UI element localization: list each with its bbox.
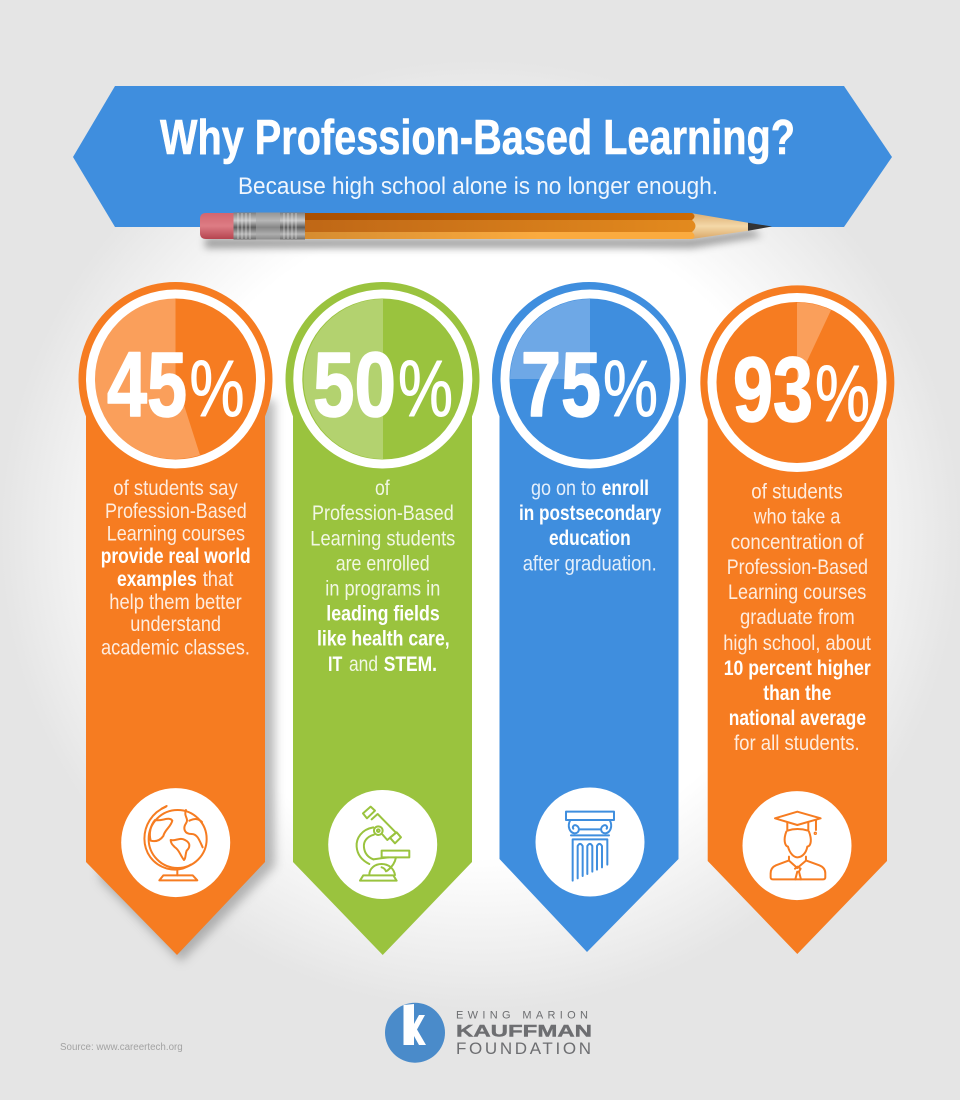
text block: Learning courses bbox=[728, 581, 866, 604]
pie chart bbox=[712, 298, 882, 468]
text block: go on to bbox=[531, 477, 596, 500]
logo wordmark: FOUNDATION bbox=[456, 1039, 591, 1058]
logo wordmark: EWING MARION bbox=[456, 1010, 588, 1022]
text block bbox=[723, 480, 871, 755]
text block: who take a bbox=[753, 506, 841, 528]
text block: for all students. bbox=[734, 732, 860, 755]
subtitle: Because high school alone is no longer enough. bbox=[238, 173, 718, 200]
icon: globe bbox=[121, 788, 230, 897]
panel: 93 percent: % bbox=[815, 349, 870, 438]
title: Why Profession-Based Learning? bbox=[160, 111, 795, 165]
header banner bbox=[73, 86, 892, 227]
text block: education bbox=[549, 527, 631, 550]
text block: Learning students bbox=[310, 528, 455, 550]
panel: 93 percent bbox=[700, 285, 894, 954]
text block: concentration of bbox=[731, 531, 863, 554]
logo mark bbox=[385, 1003, 445, 1063]
panel: 50 percent: % bbox=[398, 344, 453, 433]
text block: Profession-Based bbox=[105, 500, 247, 523]
panel shape bbox=[78, 282, 272, 955]
text block: of students say bbox=[113, 477, 238, 500]
text block: IT bbox=[328, 653, 342, 676]
pie chart bbox=[90, 294, 260, 464]
number: 75 bbox=[521, 334, 601, 436]
icon: pencil bbox=[200, 212, 772, 248]
text block: enroll bbox=[602, 477, 649, 500]
text block: after graduation. bbox=[523, 552, 657, 576]
icon: microscope bbox=[328, 790, 437, 899]
text block: like health care, bbox=[317, 628, 450, 650]
text block: help them better bbox=[109, 591, 242, 614]
text block: graduate from bbox=[740, 606, 855, 629]
panel: 75 percent bbox=[492, 282, 686, 952]
text block: of bbox=[375, 477, 390, 500]
source note: Source: www.careertech.org bbox=[60, 1042, 183, 1053]
panel shape bbox=[286, 282, 479, 955]
text block: high school, about bbox=[723, 632, 871, 655]
text block: examples bbox=[117, 568, 197, 591]
text block: understand bbox=[130, 613, 221, 636]
text block: Profession-Based bbox=[727, 556, 868, 579]
text block: than the bbox=[763, 682, 831, 705]
panel shape bbox=[492, 282, 686, 952]
text block: 10 percent higher bbox=[724, 657, 871, 680]
panel shadow bbox=[100, 400, 275, 962]
text block: Profession-Based bbox=[312, 502, 454, 525]
number: 45 bbox=[107, 334, 187, 436]
number: 93 bbox=[733, 339, 813, 441]
text block bbox=[519, 477, 662, 576]
panel shape bbox=[700, 285, 894, 954]
icon: graduate bbox=[742, 791, 852, 900]
text block: in programs in bbox=[325, 578, 440, 600]
text block: provide real world bbox=[101, 545, 251, 568]
panel: 45 percent bbox=[78, 282, 275, 962]
text block bbox=[101, 477, 251, 660]
text block: Learning courses bbox=[107, 522, 245, 546]
text block: national average bbox=[729, 707, 866, 730]
panel: 75 percent: % bbox=[603, 344, 658, 433]
panel: 50 percent bbox=[286, 282, 479, 955]
text block: are enrolled bbox=[336, 552, 430, 576]
pie chart bbox=[298, 294, 468, 464]
text block: academic classes. bbox=[101, 636, 250, 660]
icon: column bbox=[536, 788, 644, 896]
text block: of students bbox=[751, 480, 843, 504]
logo bbox=[385, 1003, 592, 1063]
text block: and bbox=[349, 653, 378, 676]
logo wordmark bbox=[456, 1010, 592, 1058]
text block bbox=[310, 477, 455, 676]
text block: in postsecondary bbox=[519, 502, 662, 525]
text block: leading fields bbox=[326, 602, 440, 626]
text block: that bbox=[203, 568, 233, 591]
number: 50 bbox=[313, 334, 396, 436]
panel: 45 percent: % bbox=[190, 344, 244, 433]
text block: STEM. bbox=[384, 653, 437, 676]
logo wordmark: KAUFFMAN bbox=[456, 1022, 592, 1041]
pie chart bbox=[505, 294, 675, 464]
